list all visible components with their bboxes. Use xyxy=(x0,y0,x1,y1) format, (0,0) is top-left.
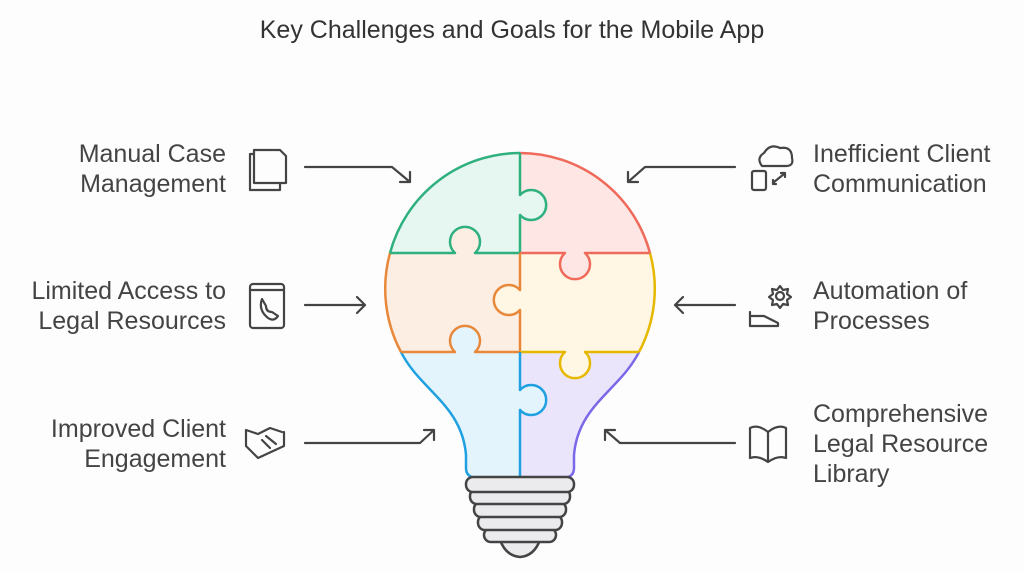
icon: phone book xyxy=(250,284,284,328)
label: Automation xyxy=(813,277,968,335)
bulb xyxy=(380,150,660,557)
icon: gear shoe xyxy=(750,286,791,326)
arrows xyxy=(305,167,735,443)
title: Key Challenges and Goals for the Mobile App xyxy=(260,16,764,44)
graphic xyxy=(244,145,794,558)
label: Library: Comprehensive xyxy=(813,400,988,428)
label: Inefficient Client Communication: Communication xyxy=(813,170,987,198)
icons xyxy=(246,146,792,462)
label: Inefficient Client Communication: Inefficient Client xyxy=(813,140,990,168)
label: Improved Client Engagement: Engagement xyxy=(84,445,226,473)
label: Automation: Automation of xyxy=(813,277,967,305)
icon: documents xyxy=(250,150,286,190)
label: Library: Library xyxy=(813,460,889,488)
knobs and seams xyxy=(520,153,546,253)
label: Manual Case Management: Management xyxy=(80,170,226,198)
label: Improved Client Engagement xyxy=(51,415,226,473)
label: Inefficient Client Communication xyxy=(813,140,990,198)
label: Manual Case Management: Manual Case xyxy=(79,140,226,168)
label: Library: Legal Resource xyxy=(813,430,988,458)
icon: handshake xyxy=(246,428,284,458)
icon: open book xyxy=(750,427,786,462)
label: Manual Case Management xyxy=(79,140,226,198)
icon: cloud phone xyxy=(752,146,792,190)
label: Automation: Processes xyxy=(813,307,930,335)
label: Limited Access: Limited Access to xyxy=(31,277,226,305)
base xyxy=(466,477,574,557)
label: Limited Access: Legal Resources xyxy=(38,307,226,335)
label: Library xyxy=(813,400,988,488)
label: Improved Client Engagement: Improved Client xyxy=(51,415,226,443)
label: Limited Access xyxy=(31,277,226,335)
